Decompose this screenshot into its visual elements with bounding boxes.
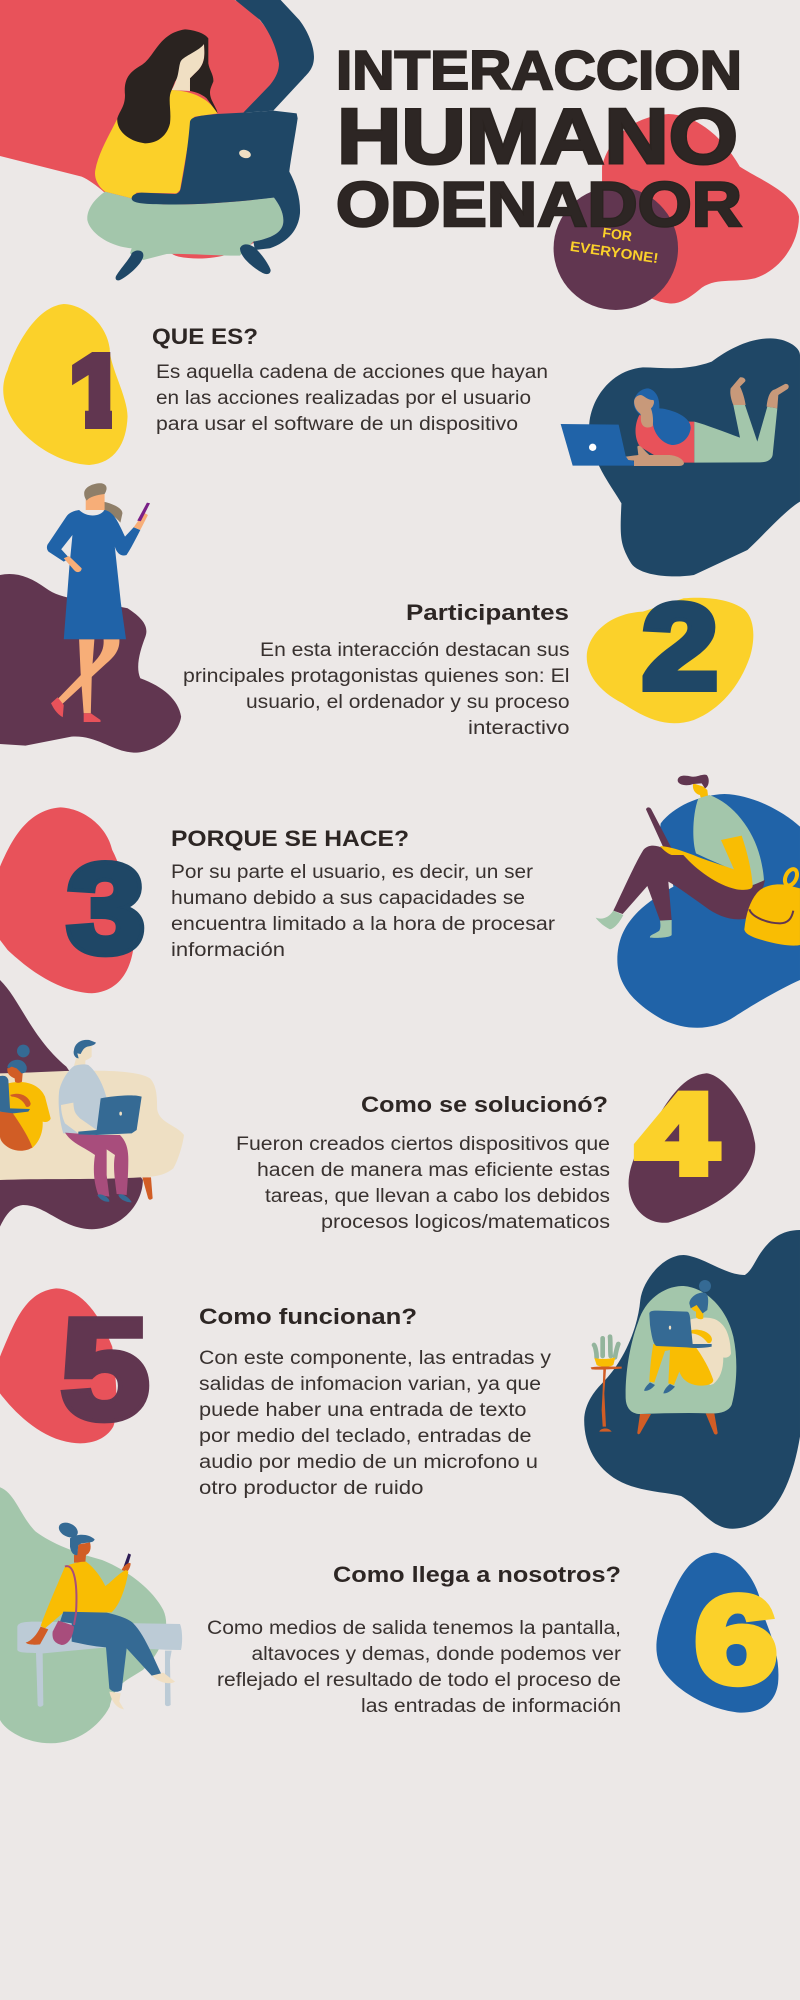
title: INTERACCION xyxy=(336,39,742,101)
section 6 text: Como medios de salida tenemos la pantalla, xyxy=(207,1618,621,1639)
section 4 text: Como se solucionó? xyxy=(361,1092,608,1117)
section 4 text: tareas, que llevan a cabo los debidos xyxy=(265,1186,610,1207)
illustration: standing woman with phone xyxy=(47,483,150,722)
badge text: for everyone: EVERYONE! xyxy=(569,238,659,266)
blob: purple left section 2 xyxy=(0,574,181,753)
section 6 text: las entradas de información xyxy=(361,1696,621,1717)
number blob 2 xyxy=(587,598,753,723)
section 6 text: reflejado el resultado de todo el proceso de xyxy=(217,1670,621,1691)
blob: purple left section 4 xyxy=(0,980,143,1229)
section 5 text: Con este componente, las entradas y xyxy=(199,1348,552,1369)
number 3: 3 xyxy=(67,838,145,979)
number blob 3 xyxy=(0,807,134,993)
blob: blue right section 3 xyxy=(617,794,800,1028)
section 2 text xyxy=(183,600,570,739)
illustration: woman with laptop xyxy=(87,0,314,280)
section 3 text: información xyxy=(171,940,285,961)
section 5 text: audio por medio de un microfono u xyxy=(199,1452,538,1473)
number blob 4 xyxy=(629,1073,755,1223)
section 6 text: Como llega a nosotros? xyxy=(333,1562,621,1587)
blob: navy right section 5 xyxy=(584,1230,800,1529)
section 2 text: Participantes xyxy=(406,600,569,625)
header blob: red right xyxy=(602,114,799,304)
title: ODENADOR xyxy=(336,170,742,240)
illustration: woman lying with laptop xyxy=(561,377,789,466)
section 4 text: hacen de manera mas eficiente estas xyxy=(257,1160,610,1181)
illustration: woman on bench with phone xyxy=(17,1520,182,1709)
section 4 text xyxy=(236,1092,610,1233)
badge text: for everyone: FOR xyxy=(601,224,633,244)
section 1 text: en las acciones realizadas por el usuario xyxy=(156,388,531,409)
number 1: 1 xyxy=(69,335,125,447)
section 1 text: para usar el software de un dispositivo xyxy=(156,414,518,435)
illustration: man with tablet and backpack xyxy=(596,775,800,946)
section 6 text xyxy=(207,1562,622,1717)
section 5 text: salidas de infomacion varian, ya que xyxy=(199,1374,541,1395)
section 2 text: En esta interacción destacan sus xyxy=(260,640,570,661)
section 5 text: Como funcionan? xyxy=(199,1304,417,1329)
section 3 text: PORQUE SE HACE? xyxy=(171,826,409,851)
section 2 text: principales protagonistas quienes son: El xyxy=(183,666,570,687)
section 6 text: altavoces y demas, donde podemos ver xyxy=(252,1644,622,1665)
section 1 text: QUE ES? xyxy=(152,324,258,349)
section 1 text: Es aquella cadena de acciones que hayan xyxy=(156,362,548,383)
blob: navy right section 1 xyxy=(589,338,800,576)
header blob: purple circle xyxy=(554,187,678,310)
section 3 text: encuentra limitado a la hora de procesar xyxy=(171,914,556,935)
section 4 text: Fueron creados ciertos dispositivos que xyxy=(236,1134,610,1155)
section 4 text: procesos logicos/matematicos xyxy=(321,1212,610,1233)
illustration: woman in armchair with plant xyxy=(591,1280,736,1434)
section 3 text xyxy=(171,826,556,961)
number 5: 5 xyxy=(61,1290,149,1448)
section 2 text: interactivo xyxy=(468,718,570,739)
number blob 5 xyxy=(0,1288,117,1443)
blob: green left section 6 xyxy=(0,1487,166,1743)
section 5 text: otro productor de ruido xyxy=(199,1478,424,1499)
number blob 6 xyxy=(656,1553,778,1713)
section 1 text xyxy=(152,324,548,435)
section 3 text: humano debido a sus capacidades se xyxy=(171,888,525,909)
illustration: two people on a sofa xyxy=(0,1040,184,1202)
number 2: 2 xyxy=(642,580,718,714)
section 3 text: Por su parte el usuario, es decir, un ser xyxy=(171,862,534,883)
title: HUMANO xyxy=(337,92,738,180)
title xyxy=(336,39,742,240)
section 5 text: puede haber una entrada de texto xyxy=(199,1400,526,1421)
header blob: red top-left xyxy=(0,0,280,259)
number 4: 4 xyxy=(637,1070,717,1197)
number blob 1 xyxy=(3,304,128,465)
section 5 text xyxy=(199,1304,552,1499)
section 5 text: por medio del teclado, entradas de xyxy=(199,1426,532,1447)
badge text: for everyone xyxy=(569,220,662,266)
number 6: 6 xyxy=(695,1571,777,1708)
section 2 text: usuario, el ordenador y su proceso xyxy=(246,692,570,713)
